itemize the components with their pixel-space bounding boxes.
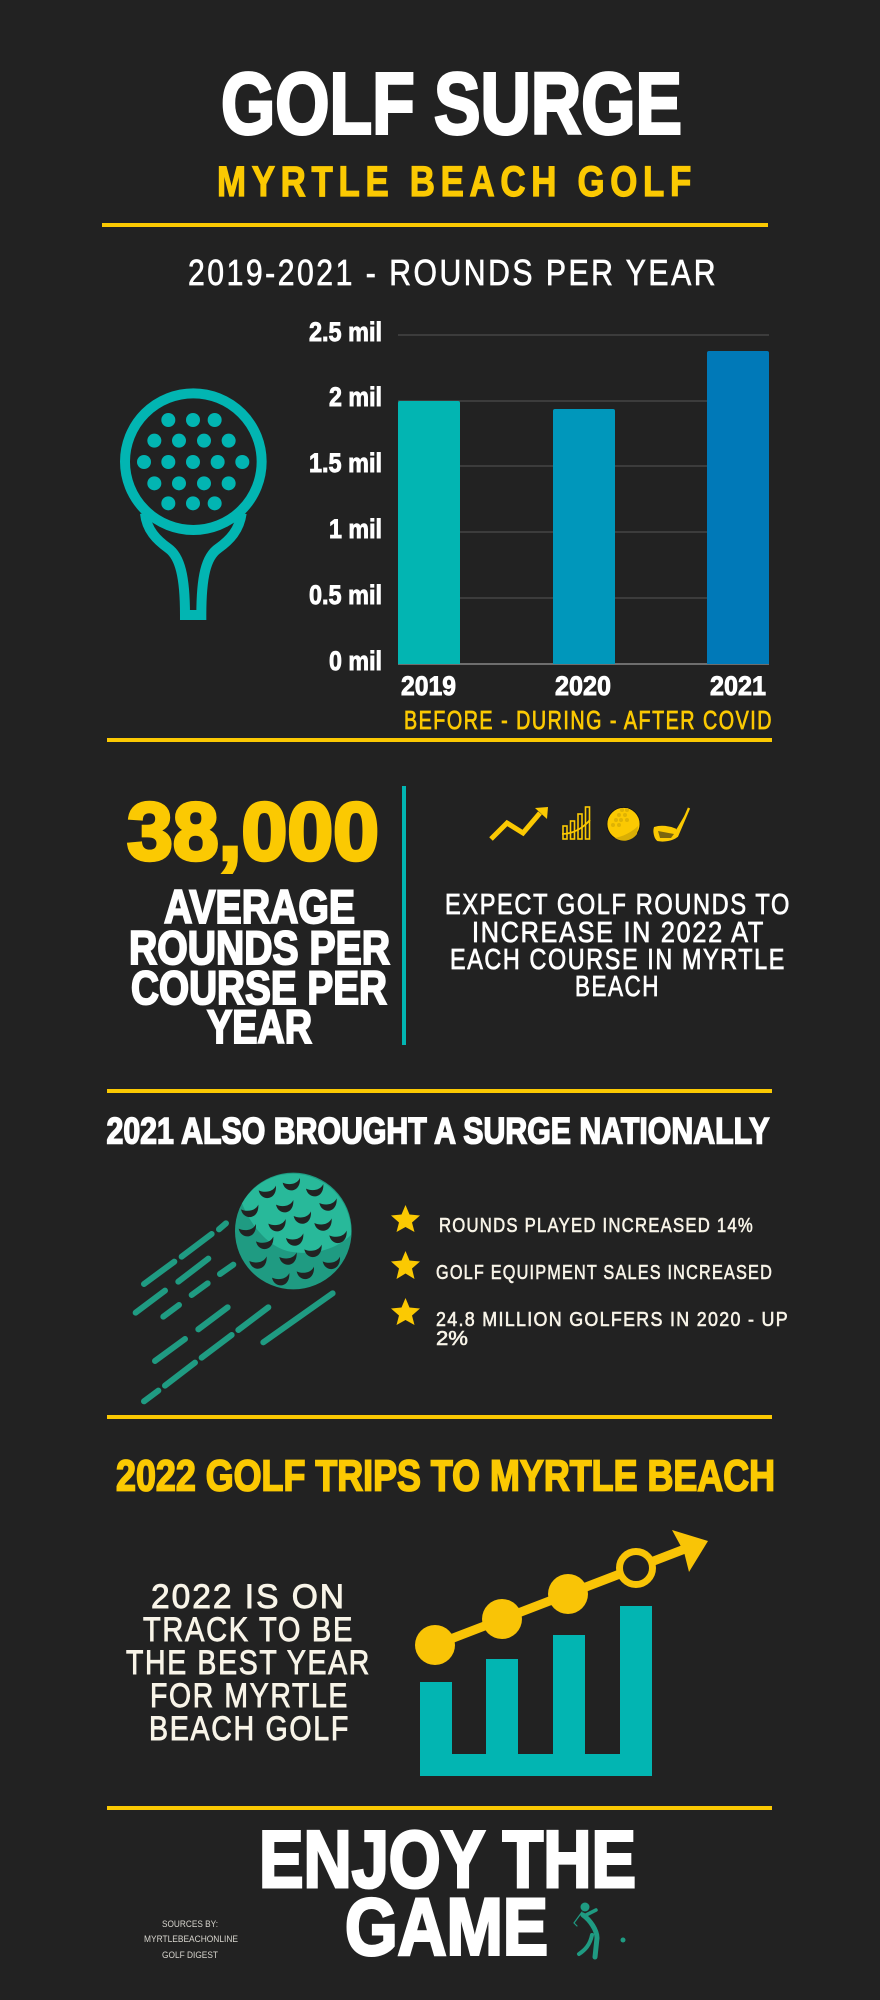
panel: average rounds xyxy=(127,786,791,1053)
big number: 38,000 xyxy=(127,786,379,878)
forecast text: INCREASE IN 2022 AT xyxy=(472,917,765,949)
stat: rounds played xyxy=(391,1205,754,1237)
x axis labels: 2019 xyxy=(401,671,456,701)
golf ball dot xyxy=(620,1938,626,1942)
y axis labels: 1 mil xyxy=(329,514,382,544)
average rounds text: COURSE PER xyxy=(131,961,387,1014)
icon: golf ball xyxy=(607,808,640,841)
chart caption: BEFORE - DURING - AFTER COVID xyxy=(404,705,773,735)
forecast text: EXPECT GOLF ROUNDS TO xyxy=(445,889,791,921)
bar 2019 xyxy=(398,401,460,664)
average rounds text xyxy=(129,880,390,1053)
outlook text: THE BEST YEAR xyxy=(126,1644,371,1682)
sources: MYRTLEBEACHONLINE xyxy=(144,1934,238,1944)
icon: rising bars xyxy=(562,807,590,839)
x axis labels: 2021 xyxy=(710,671,766,701)
icon: golfer xyxy=(574,1902,597,1957)
y axis labels xyxy=(309,317,382,676)
panel: rounds per year xyxy=(125,252,773,735)
outlook text: BEACH GOLF xyxy=(149,1710,350,1748)
x axis labels xyxy=(401,671,766,701)
y axis labels: 1.5 mil xyxy=(309,448,382,478)
average rounds text: YEAR xyxy=(207,1000,312,1053)
panel: national surge xyxy=(106,1110,789,1401)
outlook text: 2022 IS ON xyxy=(151,1578,346,1616)
icon: trend arrow xyxy=(491,807,548,839)
closing: enjoy the game: ENJOY THE xyxy=(259,1815,636,1905)
y axis labels: 0.5 mil xyxy=(309,580,382,610)
y axis labels: 2.5 mil xyxy=(309,317,382,347)
sources: GOLF DIGEST xyxy=(162,1950,218,1960)
outlook text: FOR MYRTLE xyxy=(150,1677,349,1715)
closing: enjoy the game: GAME xyxy=(345,1882,548,1972)
sources: SOURCES BY: xyxy=(162,1919,218,1929)
average rounds text: AVERAGE xyxy=(164,880,355,933)
icon: golf ball on tee xyxy=(125,393,262,615)
stat: equipment sales xyxy=(391,1251,773,1284)
forecast text: BEACH xyxy=(575,971,660,1003)
subtitle: MYRTLE BEACH GOLF xyxy=(217,158,697,206)
panel: 2022 golf trips xyxy=(116,1452,775,1776)
stat: golfers: 24.8 MILLION GOLFERS IN 2020 - UP xyxy=(436,1308,789,1331)
icon: growth chart xyxy=(415,1530,708,1776)
outlook text xyxy=(126,1578,371,1748)
chart heading: 2019-2021 - ROUNDS PER YEAR xyxy=(188,252,718,293)
bar 2020 xyxy=(553,409,615,664)
closing: enjoy the game xyxy=(259,1815,636,1972)
y axis labels: 2 mil xyxy=(329,382,382,412)
y axis labels: 0 mil xyxy=(329,646,382,676)
bar chart xyxy=(309,317,769,701)
vertical divider xyxy=(402,786,406,1045)
sources xyxy=(144,1919,238,1960)
stat: rounds played: ROUNDS PLAYED INCREASED 14% xyxy=(439,1214,754,1237)
title: GOLF SURGE xyxy=(221,56,682,152)
forecast text: EACH COURSE IN MYRTLE xyxy=(450,944,786,976)
icon: golf club xyxy=(655,808,689,840)
forecast text xyxy=(445,889,791,1003)
icon: flying golf ball xyxy=(136,1173,352,1401)
stat: equipment sales: GOLF EQUIPMENT SALES INCREASED xyxy=(436,1261,773,1284)
average rounds text: ROUNDS PER xyxy=(129,921,390,974)
bar 2021 xyxy=(707,351,769,664)
outlook text: TRACK TO BE xyxy=(143,1611,354,1649)
stat: golfers xyxy=(391,1298,789,1350)
stat: golfers: 2% xyxy=(436,1327,468,1350)
x axis labels: 2020 xyxy=(555,671,611,701)
